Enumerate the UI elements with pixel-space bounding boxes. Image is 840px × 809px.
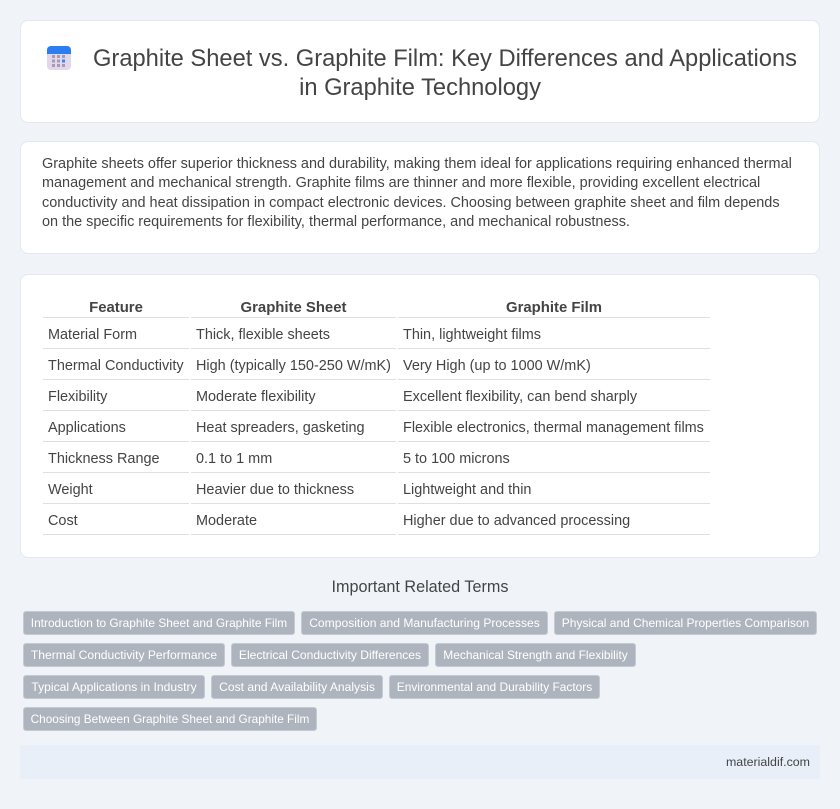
table: comparison: Moderate bbox=[196, 513, 257, 529]
title: in Graphite Technology bbox=[299, 75, 541, 101]
tags: related terms bbox=[23, 611, 817, 731]
table: comparison: Heat spreaders, gasketing bbox=[196, 420, 365, 436]
text block: description: Graphite sheets offer superior thickness and durability, making them ideal for applications requiring enhanced thermal bbox=[42, 156, 792, 172]
table: comparison: Graphite Sheet bbox=[241, 300, 346, 316]
tags: related terms: Introduction to Graphite Sheet and Graphite Film bbox=[31, 616, 287, 630]
panel: header card bbox=[20, 20, 820, 123]
tags: related terms: Thermal Conductivity Performance bbox=[31, 648, 217, 662]
table: comparison: Flexibility bbox=[48, 389, 107, 405]
icon: calendar bbox=[47, 46, 71, 70]
panel: description bbox=[20, 141, 820, 254]
text block: description: management and mechanical strength. Graphite films are thinner and more flexible, providing excellent electrical bbox=[42, 175, 760, 191]
tags: related terms: Environmental and Durability Factors bbox=[397, 680, 592, 694]
heading: related terms: Important Related Terms bbox=[332, 578, 508, 596]
tags: related terms: Mechanical Strength and Flexibility bbox=[443, 648, 628, 662]
table: comparison: Flexible electronics, thermal management films bbox=[403, 420, 704, 436]
table: comparison: 0.1 to 1 mm bbox=[196, 451, 272, 467]
tags: related terms: Physical and Chemical Properties Comparison bbox=[562, 616, 809, 630]
table: comparison: Higher due to advanced processing bbox=[403, 513, 630, 529]
table: comparison: Cost bbox=[48, 513, 78, 529]
table: comparison: Graphite Film bbox=[506, 300, 602, 316]
table: comparison: Thermal Conductivity bbox=[48, 358, 184, 374]
text block: description: on the specific requirements for flexibility, thermal performance, and mechanical robustness. bbox=[42, 214, 630, 230]
table: comparison: Feature bbox=[89, 300, 143, 316]
panel: comparison table bbox=[20, 274, 820, 558]
table: comparison: Very High (up to 1000 W/mK) bbox=[403, 358, 591, 374]
text block: description bbox=[42, 156, 792, 230]
table: comparison: Moderate flexibility bbox=[196, 389, 316, 405]
text block: description: conductivity and heat dissipation in compact electronic devices. Choosing between graphite sheet and film depends bbox=[42, 194, 780, 210]
table: comparison bbox=[43, 300, 710, 535]
table: comparison: Weight bbox=[48, 482, 93, 498]
table: comparison: Lightweight and thin bbox=[403, 482, 531, 498]
tags: related terms: Composition and Manufacturing Processes bbox=[309, 616, 540, 630]
table: comparison: Heavier due to thickness bbox=[196, 482, 354, 498]
footer credit: materialdif.com bbox=[726, 755, 810, 769]
table: comparison: High (typically 150-250 W/mK) bbox=[196, 358, 391, 374]
table: comparison: Thin, lightweight films bbox=[403, 327, 541, 343]
table: comparison: Material Form bbox=[48, 327, 137, 343]
footer bbox=[20, 745, 820, 779]
table: comparison: Excellent flexibility, can bend sharply bbox=[403, 389, 637, 405]
table: comparison: 5 to 100 microns bbox=[403, 451, 510, 467]
title bbox=[93, 46, 797, 101]
title: Graphite Sheet vs. Graphite Film: Key Differences and Applications bbox=[93, 46, 797, 72]
tags: related terms: Cost and Availability Analysis bbox=[219, 680, 375, 694]
tags: related terms: Electrical Conductivity Differences bbox=[239, 648, 421, 662]
table: comparison: Applications bbox=[48, 420, 126, 436]
table: comparison: Thick, flexible sheets bbox=[196, 327, 330, 343]
tags: related terms: Typical Applications in Industry bbox=[31, 680, 197, 694]
table: comparison: Thickness Range bbox=[48, 451, 160, 467]
tags: related terms: Choosing Between Graphite Sheet and Graphite Film bbox=[31, 712, 309, 726]
